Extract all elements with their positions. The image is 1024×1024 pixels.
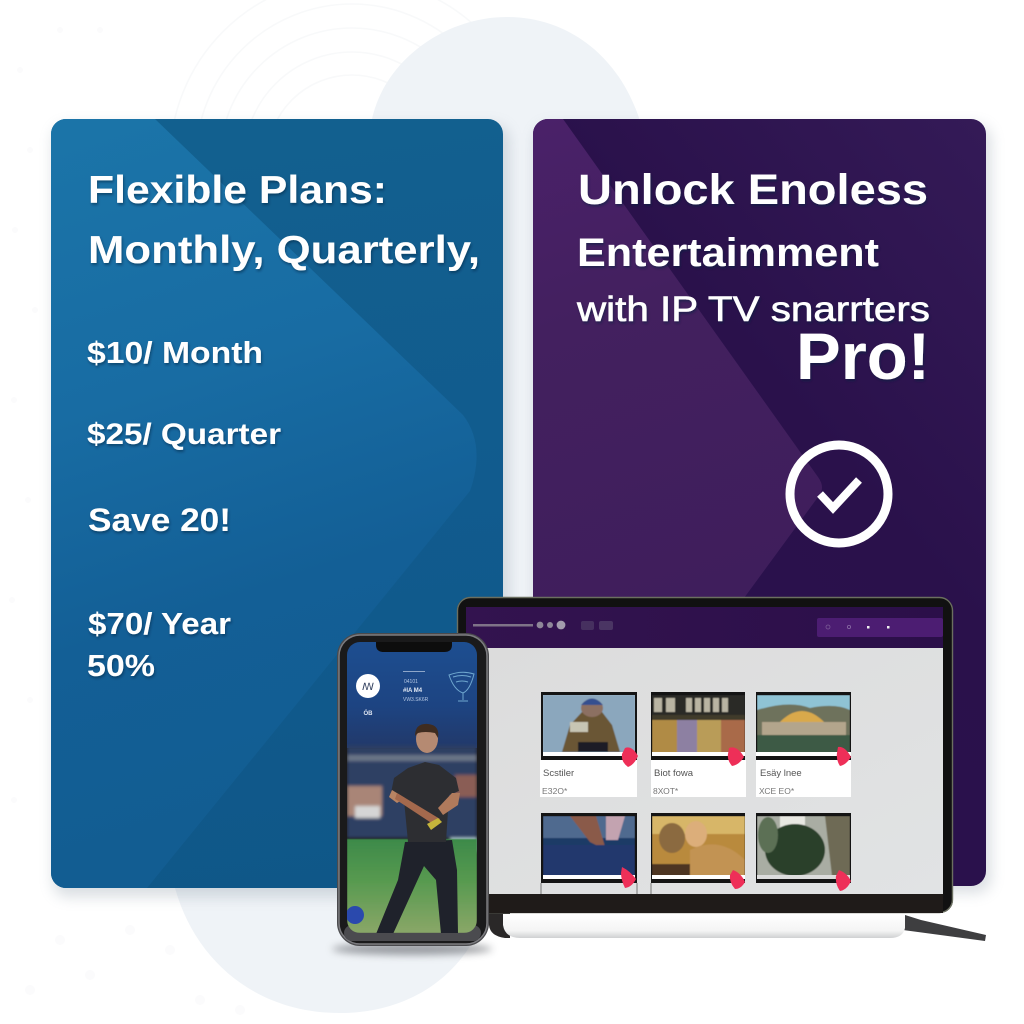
app logo badge [356,674,380,698]
grass field [347,839,477,933]
card 1 [540,692,637,797]
heading: unlock endless entertainment: Entertaimment [577,231,879,275]
price list: 50% [87,648,155,683]
card 6 [756,813,851,883]
heading: flexible plans [88,169,480,272]
panel: unlock entertainment (purple) [533,119,991,893]
background: soft blob and rings [9,0,647,1015]
card 3: Esäy lnee [760,768,802,779]
app info text: VW3.SK6R [403,697,429,703]
heading: flexible plans: Flexible Plans: [88,169,387,212]
card 2 [651,692,746,797]
price list [87,335,281,683]
price list: $10/ Month [87,335,263,370]
stadium backdrop [347,746,477,852]
card 2: 8ХОТ* [653,786,679,796]
card 3 [756,692,851,797]
heading: unlock endless entertainment [576,166,930,393]
app logo badge: ꟿ [362,682,374,693]
phone notch [376,642,452,652]
card 4 [541,813,637,894]
app label: ÓB [364,709,373,717]
heading: unlock endless entertainment: Unlock Enoless [578,166,928,214]
device: laptop [457,597,986,941]
heart badges [621,747,851,891]
icon: check mark in circle [790,445,888,543]
app header bar [466,607,943,648]
blue ball [346,906,364,924]
app info text: 04101 [404,679,418,685]
card 3: ХСЕ ЕО* [759,786,795,796]
card 5 [651,813,745,894]
panel: flexible plans (blue) [51,119,509,897]
trophy icon [449,672,474,701]
app info text [403,671,429,703]
price list: $25/ Quarter [87,418,281,451]
laptop screen [466,607,943,894]
price list: $70/ Year [88,606,231,641]
heading: unlock endless entertainment: Pro! [796,319,930,393]
card 2: Biot fowa [654,768,694,779]
phone screen [346,642,477,934]
heading: unlock endless entertainment: with IP TV snarrters [576,290,930,329]
heading: flexible plans: Monthly, Quarterly, [88,229,480,272]
device: smartphone [332,633,492,955]
card 1: ЕЗ2О* [542,786,568,796]
laptop bezel [457,597,953,913]
card 1: Scstiler [543,768,574,779]
laptop stand and leg [489,912,986,941]
player [376,724,460,934]
app info text: #IA M4 [403,688,423,694]
price list: Save 20! [88,502,231,538]
